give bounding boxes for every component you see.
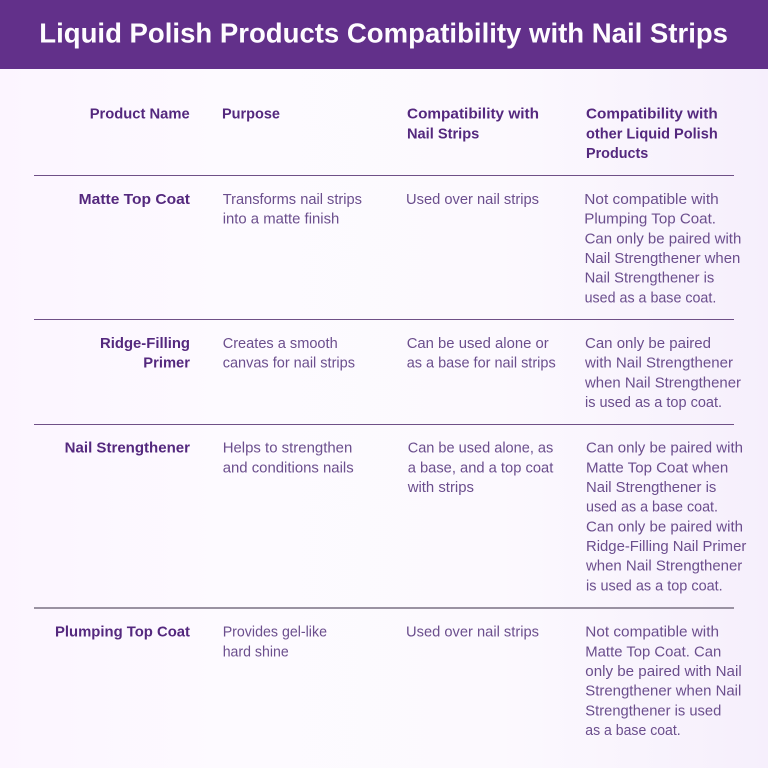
row: Nail Strengthener: Nail Strengthener is [586, 479, 717, 496]
row: Nail Strengthener: when Nail Strengthener [585, 558, 742, 575]
row: Matte Top Coat: used as a base coat. [585, 289, 716, 306]
table header row [90, 106, 718, 162]
row: Matte Top Coat: into a matte finish [223, 211, 339, 228]
row: Plumping Top Coat [55, 624, 742, 739]
row: Plumping Top Coat: Not compatible with [585, 624, 719, 641]
row: Nail Strengthener: Can only be paired with [586, 518, 743, 535]
row: Ridge-Filling Primer: Primer [143, 355, 190, 372]
row: Nail Strengthener: Can only be paired with [586, 440, 743, 457]
row: Nail Strengthener: Helps to strengthen [223, 440, 352, 457]
row: Plumping Top Coat: Strengthener is used [585, 702, 721, 719]
row: Matte Top Coat: Transforms nail strips [223, 191, 362, 208]
row: Plumping Top Coat: hard shine [223, 643, 289, 660]
row: Plumping Top Coat: Strengthener when Nail [585, 683, 741, 700]
row: Nail Strengthener: Can be used alone, as [408, 440, 554, 457]
row: Matte Top Coat: Plumping Top Coat. [584, 211, 716, 228]
row: Nail Strengthener: Ridge-Filling Nail Primer [586, 538, 746, 555]
row: Matte Top Coat: Nail Strengthener is [585, 270, 715, 287]
row: Nail Strengthener: and conditions nails [223, 459, 354, 476]
row: Nail Strengthener [65, 440, 746, 594]
row: Nail Strengthener: used as a base coat. [586, 499, 718, 516]
row: Plumping Top Coat: Matte Top Coat. Can [585, 643, 721, 660]
table header row: Purpose [222, 106, 280, 123]
row: Plumping Top Coat: Provides gel-like [223, 624, 327, 641]
row: Matte Top Coat: Matte Top Coat [79, 191, 190, 208]
table header row: Compatibility with [586, 106, 718, 123]
row: Ridge-Filling Primer [100, 335, 741, 411]
row: Plumping Top Coat: as a base coat. [585, 722, 681, 739]
row: Nail Strengthener: with strips [407, 479, 474, 496]
row: Matte Top Coat: Not compatible with [584, 191, 719, 208]
row: Plumping Top Coat: Used over nail strips [406, 624, 539, 641]
row: Ridge-Filling Primer: Ridge-Filling [100, 335, 190, 352]
row: Plumping Top Coat: only be paired with Nail [585, 663, 742, 680]
row: Ridge-Filling Primer: is used as a top coat. [585, 394, 722, 411]
row: Ridge-Filling Primer: Can be used alone or [407, 335, 549, 352]
row: Plumping Top Coat: Plumping Top Coat [55, 624, 190, 641]
title banner [0, 0, 768, 69]
row: Nail Strengthener: Nail Strengthener [65, 440, 190, 457]
table header row: other Liquid Polish [586, 125, 718, 142]
row: Ridge-Filling Primer: when Nail Strengthener [584, 374, 741, 391]
row: Matte Top Coat: Nail Strengthener when [585, 250, 740, 267]
row: Nail Strengthener: is used as a top coat. [586, 577, 723, 594]
row: Ridge-Filling Primer: Creates a smooth [223, 335, 338, 352]
row: Matte Top Coat: Can only be paired with [585, 230, 741, 247]
table header row: Product Name [90, 106, 190, 123]
table header row: Products [586, 145, 648, 162]
row: Matte Top Coat: Used over nail strips [406, 191, 539, 208]
row: Nail Strengthener: Matte Top Coat when [586, 459, 728, 476]
title banner: Liquid Polish Products Compatibility with Nail Strips [39, 18, 728, 48]
row: Ridge-Filling Primer: canvas for nail strips [223, 355, 355, 372]
row: Ridge-Filling Primer: Can only be paired [585, 335, 711, 352]
table header row: Nail Strips [407, 125, 479, 142]
row: Nail Strengthener: a base, and a top coat [408, 459, 554, 476]
table header row: Compatibility with [407, 106, 539, 123]
row: Ridge-Filling Primer: as a base for nail strips [407, 355, 556, 372]
row: Ridge-Filling Primer: with Nail Strengthener [584, 355, 733, 372]
row: Matte Top Coat [79, 191, 741, 306]
